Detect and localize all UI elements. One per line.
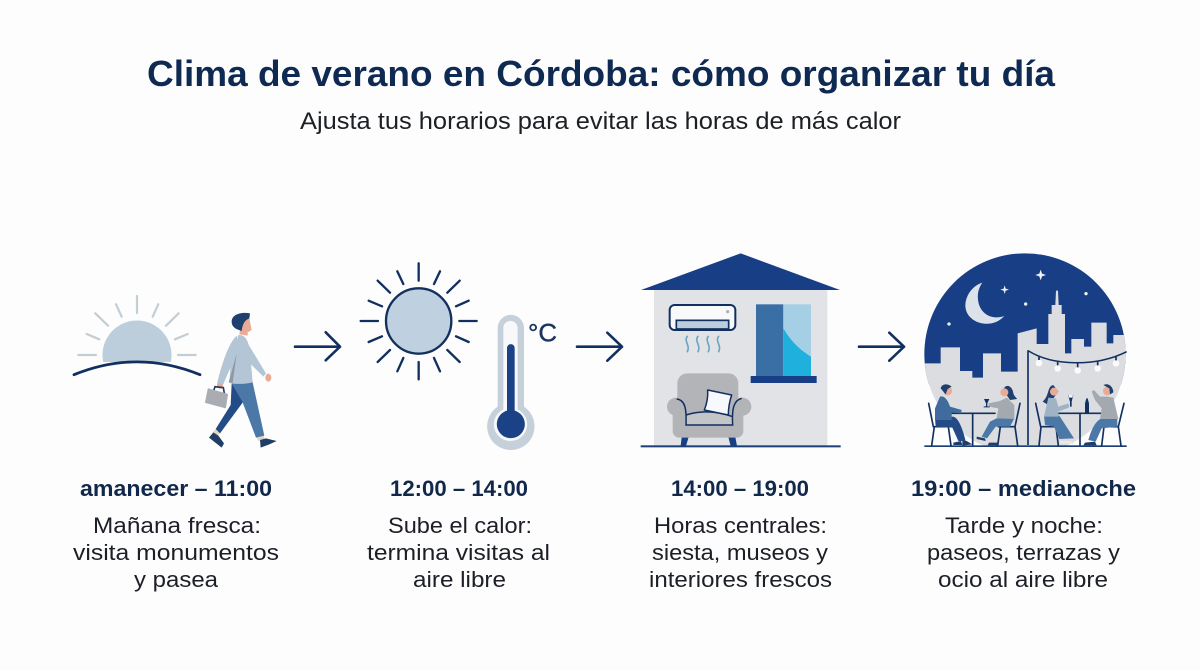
night sky and skyline — [923, 252, 1127, 446]
left table with two diners — [929, 384, 1020, 446]
step 1 text: Mañana fresca: — [93, 513, 261, 538]
window — [751, 304, 817, 383]
arrow 1 — [295, 332, 340, 360]
step 3 text: siesta, museos y — [652, 540, 829, 565]
icon: walking person — [206, 313, 277, 448]
step 4 text — [911, 476, 1136, 592]
step 4 text: 19:00 – medianoche — [911, 476, 1136, 501]
icon: sun — [361, 263, 477, 379]
air conditioner — [670, 305, 735, 330]
step 1 text: amanecer – 11:00 — [80, 476, 272, 501]
roof — [641, 253, 840, 290]
step 2 text: termina visitas al — [367, 540, 550, 565]
step 4 text: Tarde y noche: — [945, 513, 1103, 538]
diner 3 — [1043, 385, 1089, 444]
icon: sunrise — [72, 295, 202, 376]
step 3 text: interiores frescos — [649, 567, 832, 592]
wall — [654, 289, 827, 446]
cool air waves — [686, 336, 720, 352]
subtitle: Ajusta tus horarios para evitar las horas de más calor — [300, 108, 901, 135]
step 1 text — [73, 476, 279, 592]
step 2 text: aire libre — [413, 567, 506, 592]
stars — [947, 270, 1088, 326]
ground line — [924, 445, 1127, 447]
arrow 3 — [859, 333, 904, 361]
step 2 text: Sube el calor: — [388, 513, 532, 538]
arrow 2 — [577, 333, 622, 361]
diner 4 — [1083, 384, 1118, 445]
right table with two diners — [1036, 384, 1124, 446]
step 3 text: Horas centrales: — [654, 513, 827, 538]
step 4 text: paseos, terrazas y — [927, 540, 1121, 565]
step 4 text: ocio al aire libre — [938, 567, 1108, 592]
string lights — [1028, 350, 1127, 445]
step 2 text: 12:00 – 14:00 — [390, 476, 528, 501]
armchair — [667, 373, 751, 446]
icon: house interior — [641, 253, 841, 447]
title: Clima de verano en Córdoba: cómo organizar tu día — [147, 53, 1056, 94]
step 1 text: y pasea — [134, 567, 219, 592]
floor line — [641, 445, 841, 447]
diner 1 — [935, 384, 972, 446]
step 1 text: visita monumentos — [73, 540, 279, 565]
step 3 text: 14:00 – 19:00 — [671, 476, 809, 501]
icon: thermometer — [487, 315, 534, 450]
icon: night terrace — [923, 252, 1127, 447]
celsius label: °C — [528, 320, 557, 348]
diner 2 — [977, 386, 1017, 445]
step 3 text — [649, 476, 832, 592]
moon — [965, 283, 1004, 324]
step 2 text — [367, 476, 550, 592]
